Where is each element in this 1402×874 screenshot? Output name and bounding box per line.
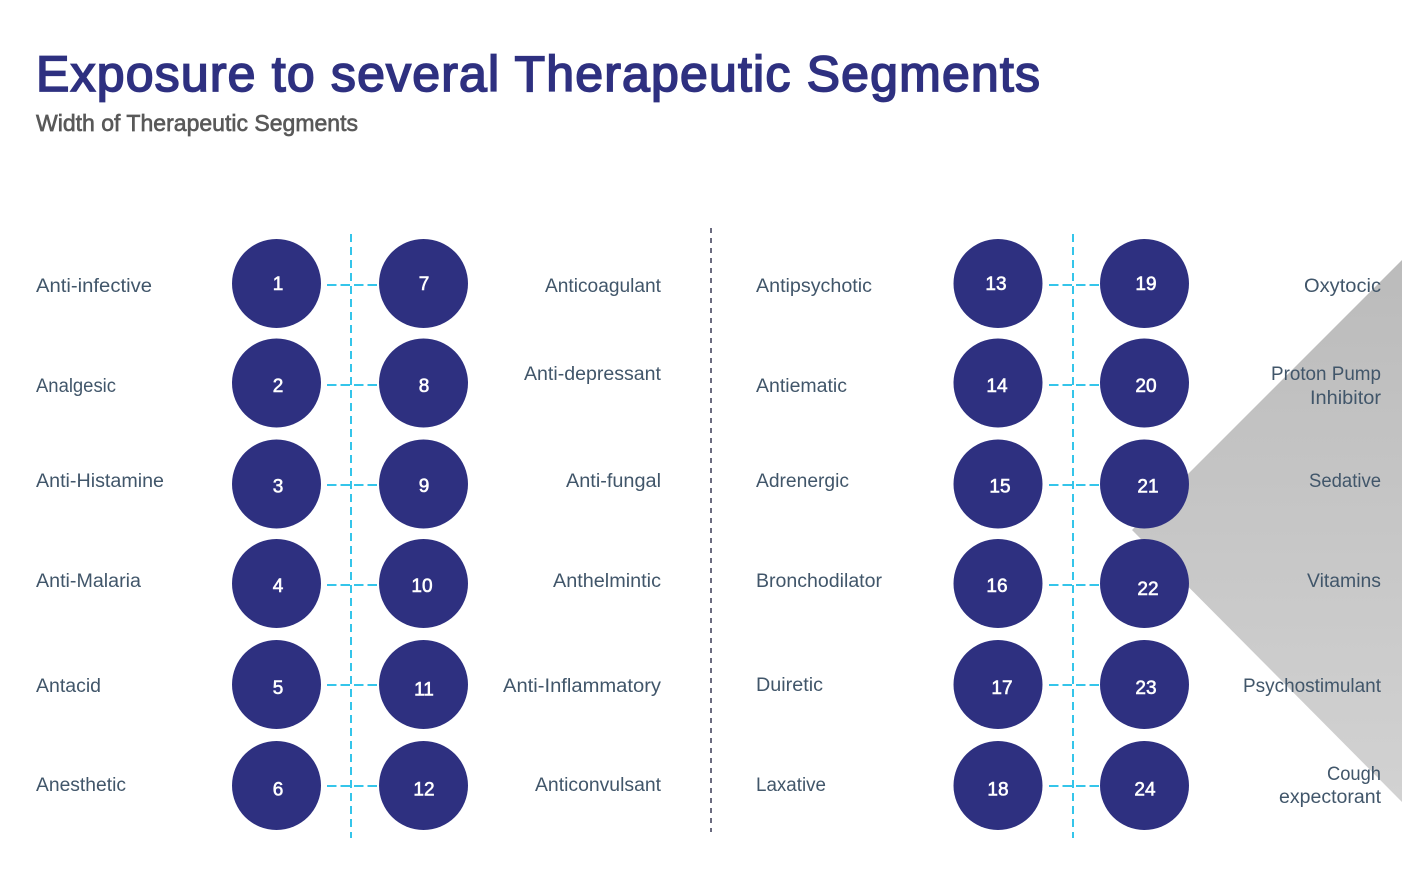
labels column 3: Adrenergic	[756, 471, 849, 492]
circle numbers: 24	[1134, 780, 1156, 800]
labels column 2: Anthelmintic	[553, 571, 661, 592]
background triangle	[1132, 260, 1402, 802]
circle numbers: 16	[986, 576, 1008, 597]
labels column 4: Inhibitor	[1310, 388, 1382, 409]
labels column 2: Anti-Inflammatory	[503, 676, 662, 697]
circle numbers: 15	[989, 476, 1011, 498]
labels column 4	[1243, 276, 1382, 808]
labels column 1: Analgesic	[36, 376, 116, 397]
subtitle: Width of Therapeutic Segments	[36, 110, 358, 136]
labels column 2: Anticonvulsant	[535, 775, 662, 796]
circle numbers: 8	[419, 376, 429, 397]
labels column 4: expectorant	[1279, 787, 1382, 808]
labels column 4: Cough	[1327, 764, 1381, 785]
labels column 3: Antiematic	[756, 376, 847, 397]
circle numbers: 7	[419, 274, 429, 295]
circle numbers: 18	[987, 780, 1009, 800]
labels column 1: Anesthetic	[36, 775, 126, 796]
circle numbers: 9	[419, 476, 429, 497]
center divider	[710, 228, 712, 832]
circle numbers: 23	[1135, 678, 1157, 699]
labels column 4: Proton Pump	[1271, 364, 1381, 385]
circles column 2	[379, 239, 468, 830]
title: Exposure to several Therapeutic Segments	[36, 46, 1040, 102]
circle numbers: 4	[273, 576, 284, 597]
circle numbers: 12	[413, 780, 435, 800]
circle numbers: 6	[273, 780, 283, 800]
labels column 4: Oxytocic	[1304, 276, 1381, 297]
connector lines: left group	[327, 234, 378, 838]
circle numbers: 5	[273, 678, 283, 699]
circle numbers: 1	[273, 274, 283, 295]
connector lines: right group	[1049, 234, 1100, 838]
circle numbers: 19	[1135, 274, 1157, 295]
circle numbers: 2	[273, 376, 283, 397]
circles column 3	[954, 239, 1042, 830]
circle numbers: 20	[1135, 376, 1157, 397]
labels column 2: Anti-fungal	[566, 471, 661, 492]
labels column 3: Bronchodilator	[756, 571, 883, 592]
circle numbers: 10	[411, 576, 433, 597]
circles column 1	[232, 239, 321, 830]
labels column 2: Anticoagulant	[545, 276, 662, 297]
labels column 3: Antipsychotic	[756, 276, 872, 297]
circle numbers: 21	[1137, 476, 1159, 498]
circle numbers: 22	[1137, 579, 1159, 600]
labels column 4: Psychostimulant	[1243, 676, 1382, 697]
labels column 1: Anti-Malaria	[36, 571, 141, 592]
circle numbers: 11	[414, 680, 434, 700]
circle numbers	[273, 274, 1159, 800]
circle numbers: 3	[273, 476, 283, 498]
labels column 4: Sedative	[1309, 471, 1381, 492]
labels column 3: Laxative	[756, 775, 826, 796]
labels column 3: Duiretic	[756, 675, 823, 696]
labels column 2: Anti-depressant	[524, 364, 662, 385]
circle numbers: 13	[985, 274, 1007, 295]
labels column 2	[503, 276, 662, 796]
labels column 1: Anti-infective	[36, 276, 152, 297]
labels column 1: Antacid	[36, 676, 101, 697]
circles column 4	[1100, 239, 1189, 830]
circle numbers: 14	[986, 376, 1008, 397]
labels column 1: Anti-Histamine	[36, 471, 164, 492]
labels column 1	[36, 276, 164, 796]
circle numbers: 17	[991, 678, 1013, 699]
labels column 4: Vitamins	[1307, 571, 1381, 592]
labels column 3	[756, 276, 883, 796]
